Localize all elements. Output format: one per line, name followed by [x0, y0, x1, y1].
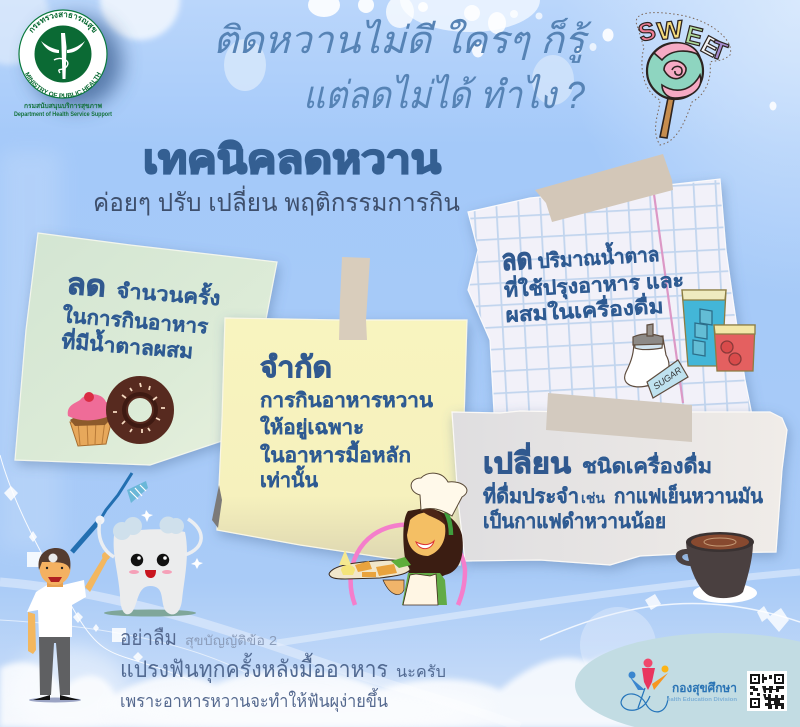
text: reduce frequency: ในการกินอาหาร	[62, 303, 209, 338]
QR code	[747, 671, 787, 711]
title: ติดหวานไม่ดี ใครๆ ก็รู้	[213, 17, 592, 63]
logo: Health Education Division	[621, 658, 738, 712]
background: bottom clouds and light ribbons	[0, 455, 800, 727]
text: change drink: ชนิดเครื่องดื่ม	[582, 451, 712, 478]
text: reduce frequency	[60, 268, 222, 365]
text: change drink: เป็นกาแฟดำหวานน้อย	[483, 508, 666, 533]
panel: gray note	[452, 393, 787, 603]
text: reduce frequency: ที่มีน้ำตาลผสม	[61, 326, 194, 363]
text: change drink	[483, 442, 763, 533]
subheading: ค่อยๆ ปรับ เปลี่ยน พฤติกรรมการกิน	[93, 185, 460, 217]
illustration: chef with tray	[329, 473, 467, 605]
icon: sugar shaker	[625, 324, 688, 398]
text: reduce sugar: ลด	[501, 243, 533, 277]
text: don't forget reminder: แปรงฟันทุกครั้งหลังมื้ออาหาร	[120, 653, 388, 683]
icon: sweet lollipop: T	[707, 35, 731, 67]
text: limit sweet food	[260, 352, 433, 492]
text: change drink: กาแฟเย็นหวานมัน	[614, 483, 763, 508]
text: don't forget reminder: อย่าลืม	[120, 627, 177, 650]
text: limit sweet food: การกินอาหารหวาน	[260, 390, 433, 412]
title	[213, 17, 592, 117]
panel: yellow note	[212, 257, 467, 565]
text: don't forget reminder: เพราะอาหารหวานจะทำให้ฟันผุง่ายขึ้น	[120, 688, 388, 712]
tape: grid note	[535, 154, 673, 222]
logo: Health Education Division: กองสุขศึกษา	[672, 681, 737, 696]
logo: Ministry of Public Health: Department of Health Service Support	[14, 111, 112, 118]
icon: blue iced drink	[682, 290, 726, 366]
text: don't forget reminder: นะครับ	[396, 664, 446, 681]
tape: yellow note	[339, 257, 370, 340]
icon: donut	[113, 383, 165, 433]
icon: red iced drink	[714, 325, 755, 371]
text: change drink: เปลี่ยน	[483, 442, 571, 480]
logo: Health Education Division: ealth Education Division	[667, 697, 738, 703]
icon: coffee cup on saucer	[676, 532, 757, 603]
text: reduce frequency: ลด	[66, 268, 107, 303]
icon: sweet lollipop	[635, 13, 731, 145]
text: reduce sugar	[501, 235, 686, 327]
icon: toothbrush	[72, 473, 148, 552]
heading: เทคนิคลดหวาน	[143, 138, 441, 182]
illustration: tooth mascot	[99, 510, 203, 616]
text: limit sweet food: ในอาหารมื้อหลัก	[260, 440, 411, 467]
logo: Ministry of Public Health: MINISTRY OF PUBLIC HEALTH	[25, 72, 101, 98]
text: change drink: ที่ดื่มประจำ	[483, 481, 579, 508]
text: don't forget reminder	[120, 627, 446, 712]
title: แต่ลดไม่ได้ ทำไง ?	[303, 73, 586, 117]
text: limit sweet food: เท่านั้น	[260, 465, 318, 492]
icon: sugar shaker: SUGAR	[651, 365, 684, 392]
text: reduce sugar: ปริมาณน้ำตาล	[537, 239, 660, 273]
text: reduce frequency: จำนวนครั้ง	[116, 275, 222, 310]
text: don't forget reminder: สุขบัญญัติข้อ 2	[185, 633, 277, 649]
icon: sweet lollipop: E	[683, 21, 706, 52]
text: reduce sugar: ผสมในเครื่องดื่ม	[505, 291, 664, 327]
text: limit sweet food: ให้อยู่เฉพาะ	[260, 415, 364, 441]
tape: gray note	[546, 393, 692, 442]
icon: sweet lollipop: S	[635, 16, 659, 48]
icon: sweet lollipop: W	[656, 15, 685, 46]
logo: Ministry of Public Health: กรมสนับสนุนบริการสุขภาพ	[24, 102, 102, 110]
icon: cupcake	[68, 392, 115, 446]
text: reduce sugar: ที่ใช้ปรุงอาหาร และ	[503, 265, 685, 303]
illustration: dentist	[27, 548, 110, 702]
logo: Ministry of Public Health: กระทรวงสาธารณสุข	[30, 12, 97, 33]
panel: grid paper note	[468, 154, 755, 430]
icon: sweet lollipop: E	[696, 31, 724, 63]
logo: Ministry of Public Health	[14, 4, 134, 120]
text: limit sweet food: จำกัด	[260, 352, 332, 384]
panel: green note	[15, 233, 277, 465]
panel: health education footer ellipse	[575, 633, 800, 727]
text: change drink: เช่น	[581, 490, 605, 506]
